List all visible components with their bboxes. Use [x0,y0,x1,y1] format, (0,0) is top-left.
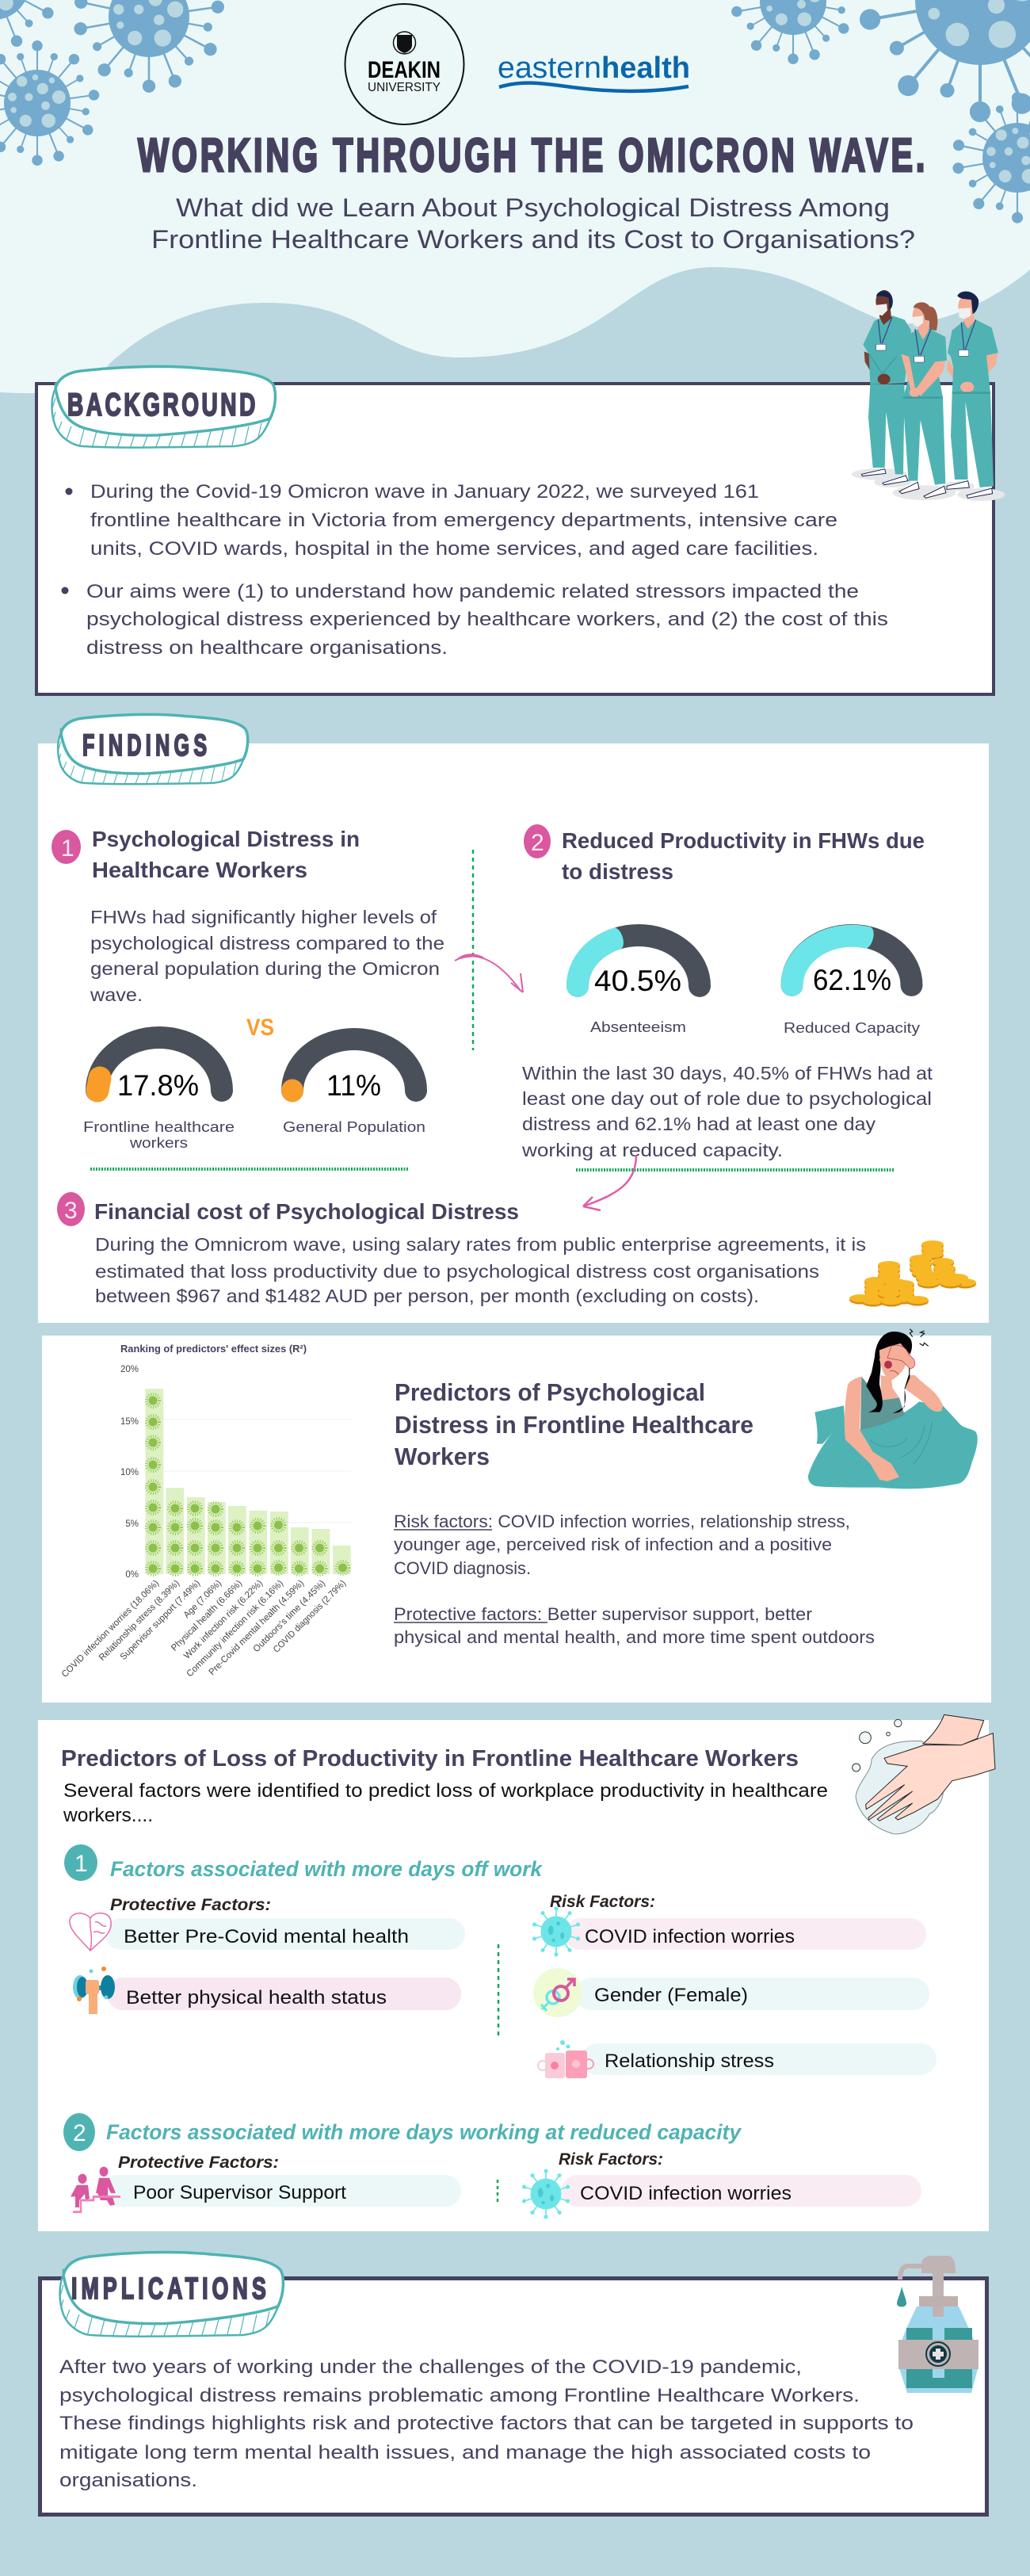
bar chart: ranking of predictors' effect sizes: COVID infection worries (18.06%) [60,1579,161,1680]
heading badge: implications: IMPLICATIONS [71,2271,266,2305]
subtitle: What did we Learn About Psychological Distress Among [176,193,890,222]
gauge: reduced capacity 62.1% [781,926,920,1036]
risk factors heading 2: Risk Factors: [559,2150,663,2169]
subtitle: Frontline Healthcare Workers and its Cost to Organisations? [151,225,915,254]
bar chart: ranking of predictors' effect sizes: 10% [120,1468,139,1477]
icon: cyan virus [532,1907,581,1956]
header background wave [0,0,1030,393]
protective pill: supervisor support [101,2175,461,2207]
finding 2: text: working at reduced capacity. [521,1140,783,1160]
finding 2: heading: 2 [531,830,544,856]
section 2 heading: factors associated with reduced capacity: Factors associated with more days working at reduced capacity [106,2120,742,2144]
gauge: absenteeism 40.5% [566,927,700,1035]
section 1 heading: factors associated with more days off work: Factors associated with more days off work [110,1857,544,1881]
finding 1: text: FHWs had significantly higher levels of [90,907,437,927]
heading and intro: Several factors were identified to predict loss of workplace productivity in healthcare [63,1780,828,1802]
icon: dumbbell [73,1966,115,2014]
protective pill: pre-Covid mental health: Better Pre-Covid mental health [124,1926,409,1947]
bar chart: ranking of predictors' effect sizes: 0% [125,1570,139,1580]
icon: heart and brain [70,1913,111,1951]
gauge: general population 11%: 11% [326,1069,381,1102]
risk pill: COVID infection worries 2: COVID infection worries [580,2183,792,2204]
panel: findings [38,743,989,1323]
protective pill: pre-Covid mental health [105,1918,465,1950]
panel: background [36,384,994,694]
bar chart: ranking of predictors' effect sizes: Work infection risk (6.22%) [182,1579,265,1661]
text: risk factors: younger age, perceived risk of infection and a positive [394,1535,832,1554]
gauge: frontline healthcare workers 17.8%: 17.8% [117,1069,199,1102]
finding 3: text: between $967 and $1482 AUD per person, per month (excluding on costs). [95,1286,759,1306]
text: protective factors: physical and mental health, and more time spent outdoors [394,1627,875,1647]
icon: gender symbols [533,1968,582,2017]
bar chart: ranking of predictors' effect sizes: Age (7.06%) [182,1579,223,1620]
logo: Eastern Health: eastern [498,52,601,85]
illustration: distressed woman in bed [808,1329,978,1489]
icon: people on stairs [71,2167,120,2212]
risk pill: relationship stress [582,2043,937,2075]
bullet list: During the Covid-19 Omicron wave in January 2022, we surveyed 161 [90,481,759,503]
heading badge: background [51,366,275,449]
bar chart: ranking of predictors' effect sizes: Ranking of predictors' effect sizes (R²) [120,1343,307,1355]
heading: predictors of psychological distress: Distress in Frontline Healthcare [395,1411,753,1439]
icon: sanitiser bottle [897,2256,978,2393]
finding 3: heading: 3 [64,1198,78,1224]
finding 3: heading: Financial cost of Psychological Distress [94,1199,519,1224]
finding 1: heading: 1 [61,835,74,862]
virus: top left large [73,0,225,93]
section 2 heading: factors associated with reduced capacity: 2 [73,2120,86,2146]
heading and intro: Predictors of Loss of Productivity in Frontline Healthcare Workers [61,1746,799,1771]
finding 3: text: estimated that loss productivity due to psychological distress cost organisations [95,1261,819,1282]
risk pill: relationship stress: Relationship stress [605,2050,774,2072]
heading: predictors of psychological distress [395,1378,753,1470]
heading badge: background: BACKGROUND [67,388,255,422]
bullet list [62,481,888,659]
bar chart: ranking of predictors' effect sizes: Physical health (6.66%) [170,1579,244,1653]
finding 3: heading [57,1192,519,1226]
bar chart: ranking of predictors' effect sizes: 15% [120,1417,139,1427]
bullet list: units, COVID wards, hospital in the home services, and aged care facilities. [90,538,818,560]
logo: Deakin University: DEAKIN [368,57,441,83]
icon: gold coins [849,1240,976,1306]
risk factors heading: Risk Factors: [550,1893,655,1911]
bar chart: ranking of predictors' effect sizes: Community infection risk (6.16%) [185,1579,285,1679]
gauge: reduced capacity 62.1%: 62.1% [813,964,891,996]
vs label: VS [246,1015,274,1041]
arrow to finding 3 [583,1156,636,1210]
bullet list: Our aims were (1) to understand how pandemic related stressors impacted the [86,581,859,602]
heading and intro [61,1746,828,1826]
finding 1: text: psychological distress compared to the [90,933,444,954]
finding 3: text: During the Omnicrom wave, using salary rates from public enterprise agreements, it is [95,1234,866,1255]
heading badge: findings: FINDINGS [82,728,207,762]
heading badge: implications [59,2252,283,2337]
bullet list: frontline healthcare in Victoria from emergency departments, intensive care [90,510,837,531]
text: implications [59,2356,914,2491]
section 1 heading: factors associated with more days off work: 1 [74,1851,88,1877]
finding 1: heading: Psychological Distress in [92,827,360,851]
bar chart: ranking of predictors' effect sizes: Relationship stress (8.39%) [97,1579,181,1663]
finding 2: text: Within the last 30 days, 40.5% of FHWs had at [522,1063,933,1084]
finding 1: heading: Healthcare Workers [92,858,307,882]
icon: cyan virus 2 [521,2169,570,2219]
finding 1: text [90,907,444,1005]
bar chart: ranking of predictors' effect sizes: Outdoors's time (4.45%) [252,1579,327,1654]
finding 1: heading [52,827,360,882]
logo: Deakin University [345,4,464,124]
bullet list: distress on healthcare organisations. [86,637,448,659]
risk pill: COVID infection worries [565,1918,926,1950]
text: implications: mitigate long term mental health issues, and manage the high associated costs to [59,2442,871,2463]
heading badge: findings [57,714,248,785]
text: protective factors: Protective factors: Better supervisor support, better [394,1604,812,1624]
bar chart: ranking of predictors' effect sizes [60,1343,351,1680]
finding 1: text: general population during the Omicron [90,958,440,979]
virus: top left corner [0,0,61,52]
logo: Eastern Health [498,52,690,91]
gauge: general population 11% [281,1039,425,1135]
bar chart: ranking of predictors' effect sizes: 5% [125,1519,139,1529]
gauge: general population 11%: General Population [283,1119,425,1135]
text: risk factors: Risk factors: COVID infection worries, relationship stress, [394,1512,850,1531]
finding 2: text [521,1063,933,1160]
finding 1: text: wave. [90,984,143,1005]
heading and intro: workers.... [63,1805,153,1826]
protective factors heading: Protective Factors: [110,1896,271,1914]
finding 2: text: distress and 62.1% had at least one day [522,1114,876,1134]
protective pill: physical health: Better physical health status [126,1987,387,2008]
divider and arrow between findings 1 and 2 [455,850,523,1050]
risk pill: COVID infection worries 2 [562,2175,921,2207]
text: implications: These findings highlights risk and protective factors that can be targeted in supports to [59,2413,914,2434]
panel: predictors of psychological distress [42,1329,991,1703]
icon: mugs with hearts [538,2040,593,2078]
virus: left [0,40,100,166]
section 1 heading: factors associated with more days off work [64,1844,544,1881]
bullet list: psychological distress experienced by healthcare workers, and (2) the cost of this [86,609,888,630]
text: implications: organisations. [59,2470,197,2491]
finding 3: text [95,1234,866,1306]
virus: right [952,92,1030,224]
text: protective factors [394,1604,875,1647]
virus: top right large [858,0,1030,122]
text: implications: psychological distress remains problematic among Frontline Healthcare Workers. [59,2385,860,2406]
gauge: frontline healthcare workers 17.8%: workers [129,1135,188,1151]
bar chart: ranking of predictors' effect sizes: Supervisor support (7.49%) [119,1579,202,1662]
icon: washing hands [853,1714,995,1834]
title: WORKING THROUGH THE OMICRON WAVE. [138,129,925,182]
protective factors heading 2: Protective Factors: [118,2154,279,2172]
heading: predictors of psychological distress: Workers [395,1443,490,1470]
text: risk factors: COVID diagnosis. [394,1558,531,1578]
finding 2: heading: Reduced Productivity in FHWs due [562,828,925,853]
virus: top right small [731,0,856,64]
gauge: absenteeism 40.5%: 40.5% [594,965,681,997]
illustration: three nurses [852,290,1005,501]
bar chart: ranking of predictors' effect sizes: 20% [120,1365,139,1374]
protective pill: physical health [107,1978,461,2010]
gauge: frontline healthcare workers 17.8% [83,1038,235,1151]
logo: Eastern Health: health [601,52,690,85]
protective pill: supervisor support: Poor Supervisor Support [133,2182,346,2203]
finding 2: heading: to distress [562,859,673,884]
heading: predictors of psychological distress: Predictors of Psychological [395,1378,705,1406]
bar chart: ranking of predictors' effect sizes: Pre-Covid mental health (4.59%) [208,1579,306,1677]
bar chart: ranking of predictors' effect sizes: COVID diagnosis (2.79%) [272,1579,348,1655]
section 2 heading: factors associated with reduced capacity [63,2113,742,2151]
finding 2: text: least one day out of role due to psychological [522,1088,932,1109]
finding 2: heading [524,824,925,884]
risk pill: gender: Gender (Female) [594,1985,748,2006]
risk pill: COVID infection worries: COVID infection worries [585,1926,795,1947]
gauge: reduced capacity 62.1%: Reduced Capacity [784,1020,920,1036]
text: implications: After two years of working under the challenges of the COVID-19 pandemic, [59,2356,802,2378]
subtitle [151,193,915,254]
text: risk factors [394,1512,850,1578]
gauge: frontline healthcare workers 17.8%: Frontline healthcare [83,1119,235,1135]
risk pill: gender [575,1978,929,2010]
panel: implications [40,2278,987,2514]
gauge: absenteeism 40.5%: Absenteeism [590,1019,686,1035]
logo: Deakin University: UNIVERSITY [368,81,441,94]
panel: predictors of loss of productivity [38,1714,995,2231]
